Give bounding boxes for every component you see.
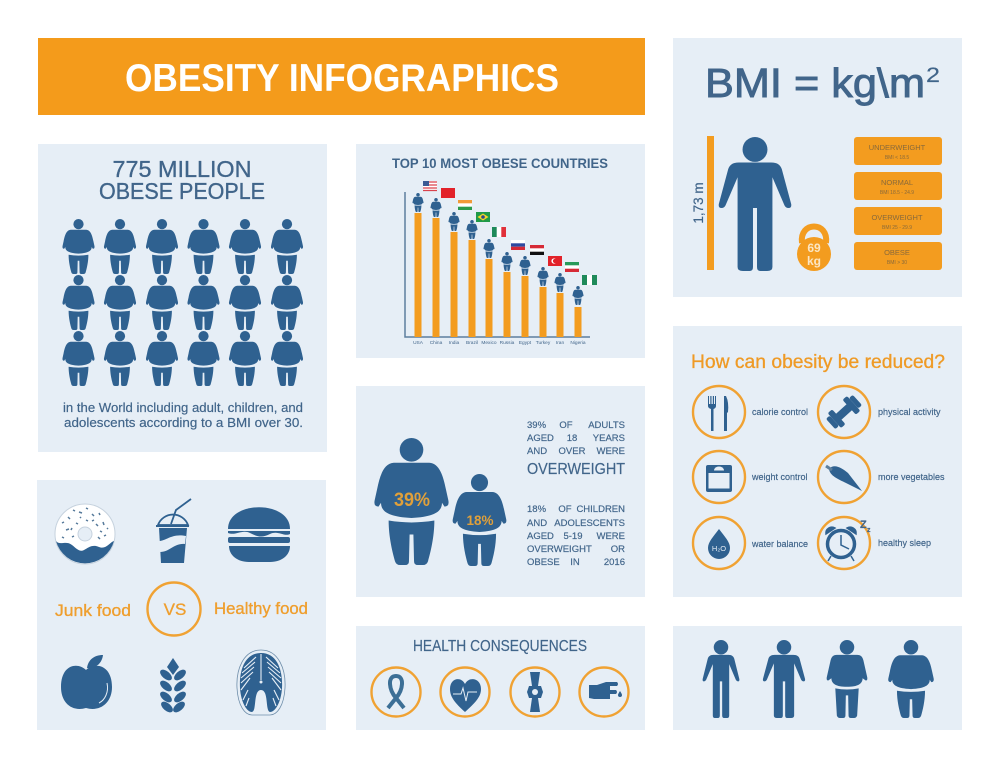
child figure 18%: 18% [466,513,494,528]
heading: 775 million: OBESE PEOPLE [99,178,265,204]
title banner: OBESITY INFOGRAPHICS [125,57,559,100]
weight control [693,451,808,503]
VS badge [148,582,200,636]
panel: top 10 countries [356,144,645,358]
heading: How can obesity be reduced? [691,352,945,373]
BMI formula heading: 2 [926,64,940,87]
description text: adolescents according to a BMI over 30. [64,416,303,430]
water balance: water balance [751,539,808,549]
physical activity: physical activity [878,407,941,417]
kettlebell 69 kg: 69 [807,241,821,255]
child statistic text: 2016 [604,557,625,568]
BMI formula heading: BMI = kg\m [705,60,925,106]
icon: donut [55,504,115,564]
weight control: weight control [751,472,808,482]
icon: wheat [158,658,188,714]
calorie control: calorie control [752,407,808,417]
BMI category boxes [854,137,942,270]
BMI category boxes: OVERWEIGHT [871,213,923,222]
adult figure 39%: 39% [394,490,430,511]
BMI category boxes: OBESE [884,248,910,257]
BMI category boxes: UNDERWEIGHT [869,143,926,152]
heading: 775 million: 775 MILLION [112,156,252,182]
BMI category boxes: BMI 25 - 29.9 [882,225,912,231]
icon: finger blood drop [580,668,628,716]
water balance: H₂O [712,544,726,553]
figure: slim [703,640,739,718]
junk food label: Junk food [55,601,131,620]
icon: salmon steak [237,650,285,715]
height ruler [691,136,714,270]
bar chart: Russia [500,340,515,346]
height ruler: 1,73 m [691,182,706,224]
icon: burger [228,507,290,562]
BMI category boxes: NORMAL [881,178,913,187]
adult statistic text: WERE [596,446,625,457]
more vegetables [818,451,945,503]
icon: knee joint [510,668,560,716]
bar chart: Egypt [519,340,532,346]
child statistic text: OVERWEIGHT [527,544,592,555]
child statistic text: OF [558,504,572,515]
chart heading: TOP 10 MOST OBESE COUNTRIES [392,155,608,171]
panel: junk vs healthy food [37,480,326,730]
adult statistic text: OVER [559,446,586,457]
healthy sleep: healthy sleep [878,538,931,548]
child statistic text: OBESE [527,557,560,568]
icon: heart with pulse [440,668,490,716]
healthy sleep [818,517,931,569]
more vegetables: more vegetables [878,472,945,482]
bar chart: Iran [556,340,564,346]
adult statistic text: OF [559,420,573,431]
pictogram grid of obese figures [62,219,303,386]
adult statistic text: AND [527,446,547,457]
bar chart [405,192,590,346]
calorie control [693,386,808,438]
bar chart: India [449,340,460,346]
child statistic text: 18% [527,504,547,515]
physical activity [818,386,941,438]
kettlebell 69 kg [797,226,831,271]
bar chart: Mexico [481,340,497,346]
child statistic text: IN [570,557,580,568]
healthy sleep: z [867,527,871,534]
bar chart: USA [413,340,424,346]
child statistic text [527,504,625,568]
child statistic text: ADOLESCENTS [554,518,625,529]
adult statistic text: 18 [567,433,577,444]
panel: BMI [673,38,962,297]
BMI category boxes: BMI 18.5 - 24.9 [880,190,914,196]
child statistic text: AGED [527,531,554,542]
title banner [38,38,645,115]
adult statistic text [527,420,625,457]
bar chart: Turkey [536,340,551,346]
description text: in the World including adult, children, and [63,401,303,415]
adult statistic text: YEARS [593,433,625,444]
description text [63,401,303,430]
child statistic text: 5-19 [563,531,583,542]
child statistic text: AND [527,518,547,529]
child statistic text: CHILDREN [576,504,625,515]
child figure 18% [453,474,506,566]
adult statistic text: 39% [527,420,547,431]
person figure [719,137,791,271]
overweight label: OVERWEIGHT [527,461,625,478]
water balance [693,517,808,569]
panel: how can obesity be reduced [673,326,962,597]
heading: 775 million [99,156,265,204]
heading: HEALTH CONSEQUENCES [413,638,587,655]
adult statistic text: ADULTS [588,420,625,431]
child statistic text: WERE [596,531,625,542]
BMI category boxes: BMI < 18.5 [885,155,909,161]
figure: normal [763,640,805,718]
bar chart: China [430,340,443,346]
healthy food label: Healthy food [214,599,308,618]
figure: obese [888,640,934,718]
VS badge: VS [164,600,186,619]
figure: overweight [827,640,867,718]
kettlebell 69 kg: kg [807,254,821,268]
bar chart: Nigeria [570,340,586,346]
child statistic text: OR [611,544,625,555]
panel: health consequences [356,626,645,730]
adult statistic text: AGED [527,433,554,444]
panel: 775 million obese people [38,144,327,452]
adult figure 39% [374,438,449,565]
icon: soft drink cup [156,499,191,563]
panel: body type figures [673,626,962,730]
icon: apple [61,655,112,709]
BMI category boxes: BMI > 30 [887,260,907,266]
panel: overweight statistics [356,386,645,597]
healthy sleep: Z [860,519,867,531]
flags [423,181,597,285]
icon: ribbon [372,668,420,716]
bar chart: Brazil [466,340,478,346]
